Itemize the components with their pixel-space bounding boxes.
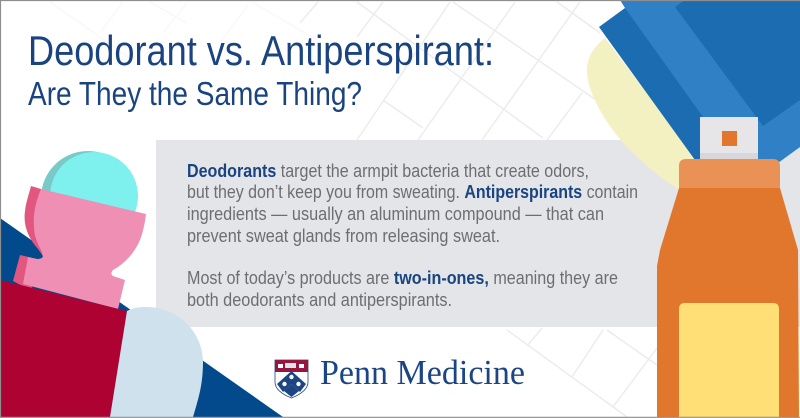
- spray bottle lid dark panel: [675, 0, 800, 126]
- spray bottle label: [679, 303, 779, 417]
- title: Are They the Same Thing?: [28, 76, 362, 113]
- body text: definitions: both deodorants and antiperspirants.: [187, 289, 452, 310]
- logo shield: [275, 360, 308, 398]
- body text: definitions: [187, 160, 638, 310]
- title: Deodorant vs. Antiperspirant:: [28, 27, 494, 74]
- spray bottle shoulder: [679, 159, 780, 189]
- roll-on light-blue base: [110, 307, 203, 417]
- spray bottle lid dark strip: [599, 8, 703, 160]
- spray bottle body: [657, 188, 799, 417]
- body text: definitions: Deodorants target the armpit bacteria that create odors,: [187, 160, 589, 181]
- roll-on dark pink side: [13, 186, 50, 290]
- logo wordmark: Penn Medicine: [320, 353, 525, 392]
- navy triangle background: [0, 218, 283, 417]
- icon: roll-on deodorant: [0, 151, 203, 417]
- spray bottle lid light: [620, 0, 800, 163]
- spray nozzle: [700, 117, 758, 161]
- body text: definitions: but they don’t keep you from sweating. Antiperspirants contain: [187, 181, 638, 202]
- body text: definitions: prevent sweat glands from releasing sweat.: [187, 225, 500, 246]
- panel: text background: [156, 140, 800, 327]
- body text: definitions: ingredients — usually an aluminum compound — that can: [187, 203, 604, 224]
- title: [28, 27, 494, 113]
- roll-on pink collar: [23, 189, 146, 309]
- logo: Penn Medicine: [275, 353, 525, 398]
- icon: spray bottle: [587, 0, 800, 417]
- roll-on crimson body: [0, 280, 127, 417]
- roll-on ball: [41, 151, 138, 245]
- body text: definitions: Most of today’s products are two-in-ones, meaning they are: [187, 267, 618, 288]
- spray bottle cream shadow: [587, 38, 705, 190]
